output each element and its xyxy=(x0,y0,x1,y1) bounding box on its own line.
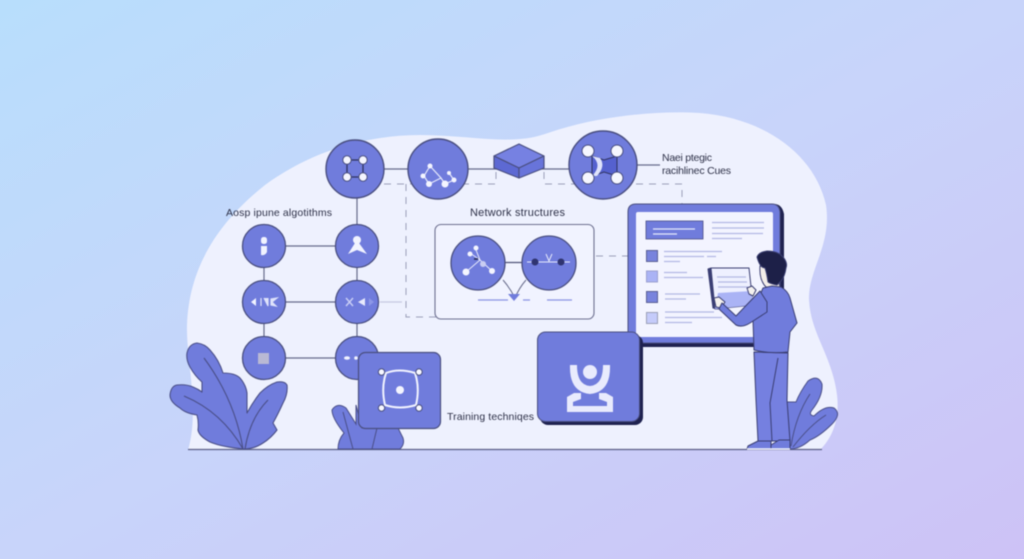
node: top left xyxy=(242,224,286,268)
illustration xyxy=(170,112,838,450)
legs xyxy=(754,352,790,441)
right plant xyxy=(775,378,838,449)
node: top circle 2 xyxy=(408,139,468,199)
ground line xyxy=(188,448,822,450)
torso xyxy=(753,286,797,353)
label: architectures xyxy=(662,152,731,177)
label: architectures: racihlinec Cues xyxy=(662,165,731,177)
node: top circle 1 xyxy=(326,140,384,198)
arm xyxy=(719,291,767,326)
tablet xyxy=(708,268,753,309)
label: architectures: Naei ptegic xyxy=(662,152,712,164)
list item 4 xyxy=(646,312,722,324)
dashed connectors xyxy=(384,172,682,317)
panel: network structures xyxy=(435,224,594,319)
arrow down xyxy=(508,294,520,301)
label: training techniques: Training techniqes xyxy=(447,411,534,423)
node: bottom left xyxy=(242,336,286,380)
list item 3 xyxy=(646,292,700,302)
node: bottom right xyxy=(336,336,378,380)
person xyxy=(708,251,797,449)
label: network structures: Network structures xyxy=(470,207,566,219)
left circle column xyxy=(242,224,378,380)
list item 2 xyxy=(646,271,703,282)
header text lines xyxy=(712,222,764,238)
square: training xyxy=(358,352,440,428)
header block xyxy=(646,221,703,239)
connector lines xyxy=(264,165,660,358)
network circle left xyxy=(451,236,505,290)
icon: person figure xyxy=(567,365,613,412)
label: algorithms: Aosp ipune algotithms xyxy=(226,207,332,219)
node: large circle xyxy=(569,131,637,199)
node: top right xyxy=(336,224,378,268)
shoes xyxy=(747,440,790,449)
hair and face xyxy=(757,251,787,287)
plant: small xyxy=(332,405,404,449)
node: middle right xyxy=(336,280,378,324)
background blob xyxy=(187,112,838,450)
icon: cube xyxy=(494,144,544,178)
hands xyxy=(714,286,756,308)
square: large icon xyxy=(538,332,643,425)
node: middle left xyxy=(242,280,286,324)
panel: document screen xyxy=(628,204,784,347)
left plant xyxy=(170,343,287,449)
list item 1 xyxy=(646,250,722,262)
network circle right xyxy=(522,236,576,290)
